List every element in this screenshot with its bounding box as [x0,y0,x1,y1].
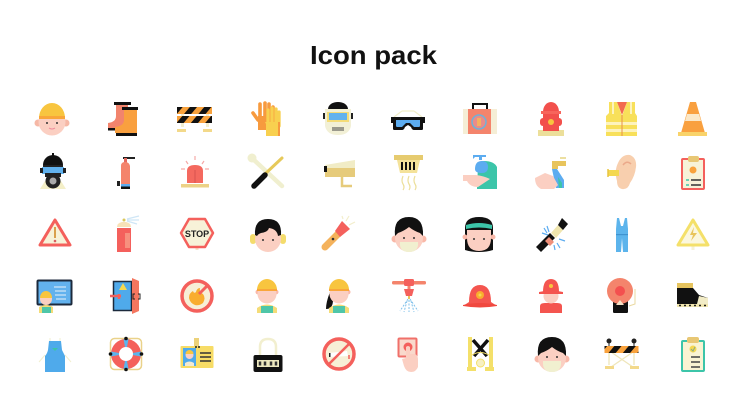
icon: safety vest [606,102,637,136]
icon: emergency exit door [110,278,140,314]
icon: warning triangle [40,220,70,245]
icon: woman with headband [462,217,496,252]
icon: heat detector [394,155,423,190]
icon: person with face mask [392,217,426,252]
icon: stop sign: STOP [185,229,209,239]
icon: male worker [256,279,278,313]
icon: fire hydrant [538,102,564,136]
icon: presentation board with worker [38,280,72,313]
icon: life buoy [109,337,143,371]
icon: stop sign [181,219,213,250]
icon: road barricade [177,107,212,132]
icon: no open flame sign [182,281,212,311]
icon: man with face mask [534,337,570,372]
icon: ear with ear plug [608,155,636,189]
icon: flashlight [325,216,355,247]
icon: gas mask [40,153,66,189]
icon: fire alarm bell [607,278,635,313]
icon: safety goggles [391,111,425,130]
icon: welding mask [323,102,353,135]
icon: no smoking sign [324,339,354,369]
icon: blue apron [39,338,71,372]
icon: rubber boots [108,102,138,136]
title: Icon pack [310,40,438,70]
icon: safety harness [467,337,494,371]
icon: combination padlock [254,339,282,372]
icon: worker face with hard hat [34,103,70,136]
icon: work gloves [253,103,280,136]
icon: red clipboard [682,156,704,189]
icon: electric hazard sign [678,220,708,250]
icon: first aid kit [463,104,497,134]
icon: spray can [117,216,139,252]
icon: seat belt buckle [536,218,568,252]
icon: wrench and screwdriver [248,154,282,186]
icon: firefighter helmet [463,285,497,308]
icon: fire sprinkler [392,279,426,312]
icon: folding road barrier [604,338,639,369]
icon: face with ear muffs [250,219,286,252]
icon: security camera [324,160,355,186]
icon: hands under faucet [535,157,566,189]
icon: safety boot [677,283,708,307]
icon: traffic cone [678,102,707,136]
icon: green clipboard [682,337,704,371]
icon: ID badge [180,338,214,368]
icon: finger pressing alarm button [398,338,418,372]
icon: blue overalls [616,218,628,252]
icon: female worker [326,279,350,313]
icon: firefighter [539,279,563,313]
icon: fire extinguisher [117,157,135,189]
icon: emergency siren light [181,156,209,188]
icon: hand sanitizer [463,155,497,189]
